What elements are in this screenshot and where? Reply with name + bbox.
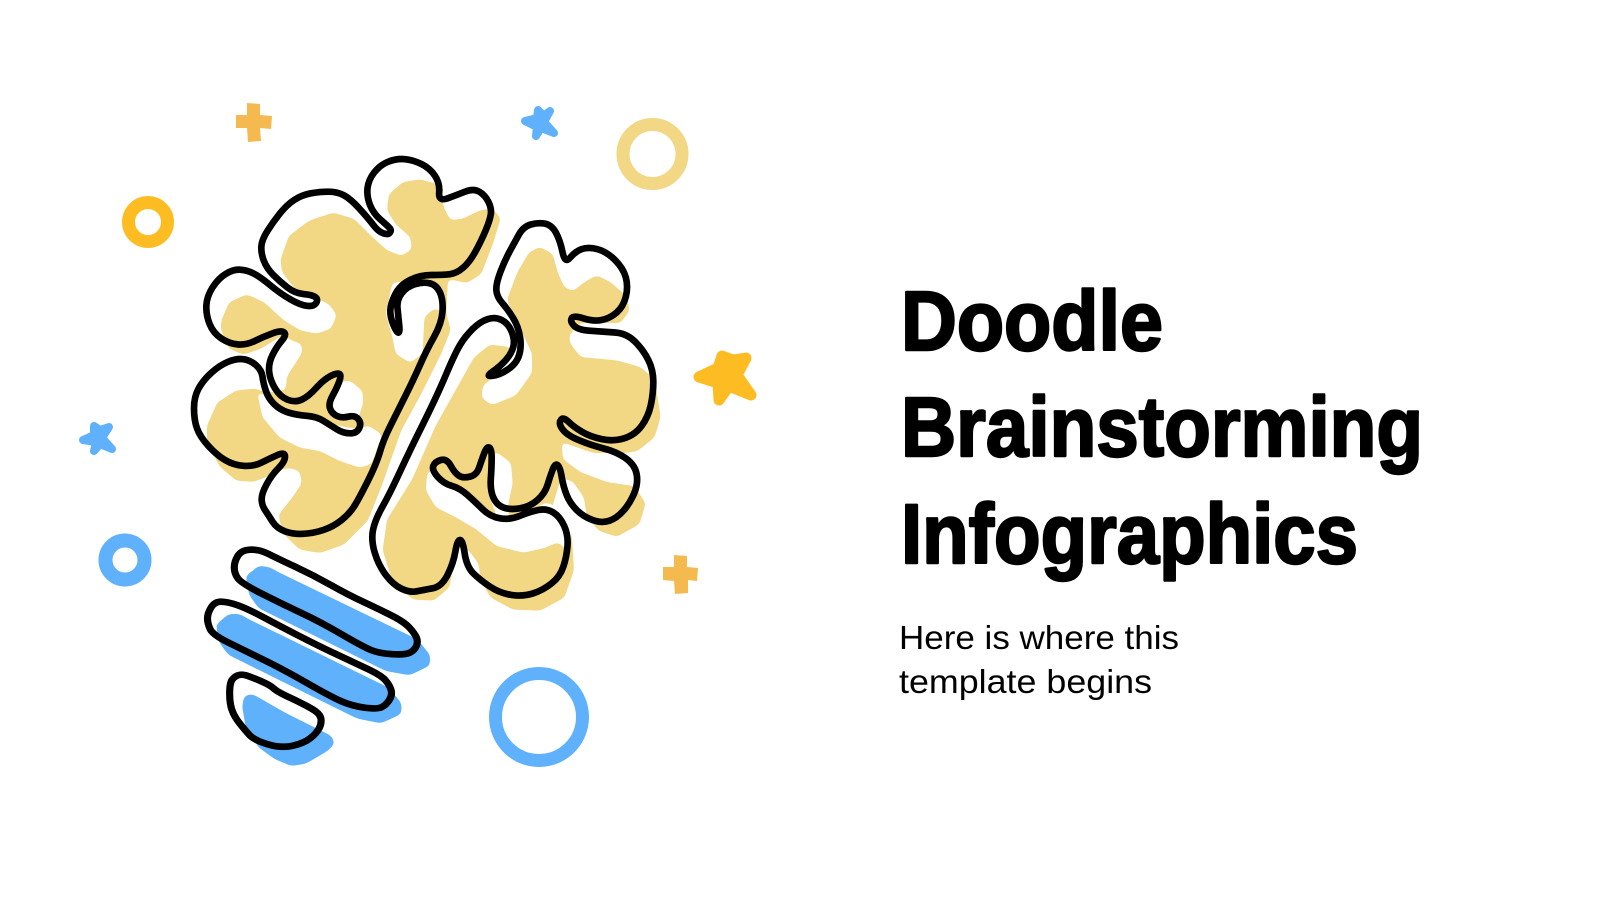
icon: blue star left — [83, 426, 112, 451]
outline bar 2 — [207, 602, 392, 708]
outline bulb tip — [230, 675, 321, 747]
blue fill bulb tip — [243, 695, 334, 765]
left hemisphere highlights — [258, 282, 443, 467]
left hemisphere fill — [208, 181, 499, 552]
brain illustration — [194, 159, 659, 609]
blue fill bar 2 — [217, 615, 400, 722]
icon: blue ring left — [106, 540, 144, 580]
outline bar 1 — [234, 550, 417, 654]
right hemisphere highlights — [427, 453, 573, 552]
title: Doodle — [901, 274, 1163, 368]
icon: blue star top — [525, 110, 554, 136]
icon: orange plus top — [236, 103, 272, 142]
light bulb base — [207, 550, 429, 765]
subtitle: Here is where this — [899, 620, 1179, 657]
blue fill bar 1 — [247, 567, 429, 674]
icon: yellow ring top right — [623, 124, 682, 184]
icon: orange plus right — [663, 555, 698, 594]
icon: orange ring left — [128, 202, 168, 242]
title: Infographics — [901, 487, 1358, 581]
title: Brainstorming — [901, 380, 1423, 474]
icon: blue ring bottom — [496, 674, 582, 760]
title — [901, 274, 1423, 581]
subtitle: template begins — [899, 664, 1152, 701]
left hemisphere outline — [194, 159, 491, 534]
right hemisphere fill — [384, 248, 659, 609]
subtitle — [899, 620, 1179, 701]
icon: orange star right — [699, 356, 751, 400]
right hemisphere outline — [372, 223, 653, 596]
